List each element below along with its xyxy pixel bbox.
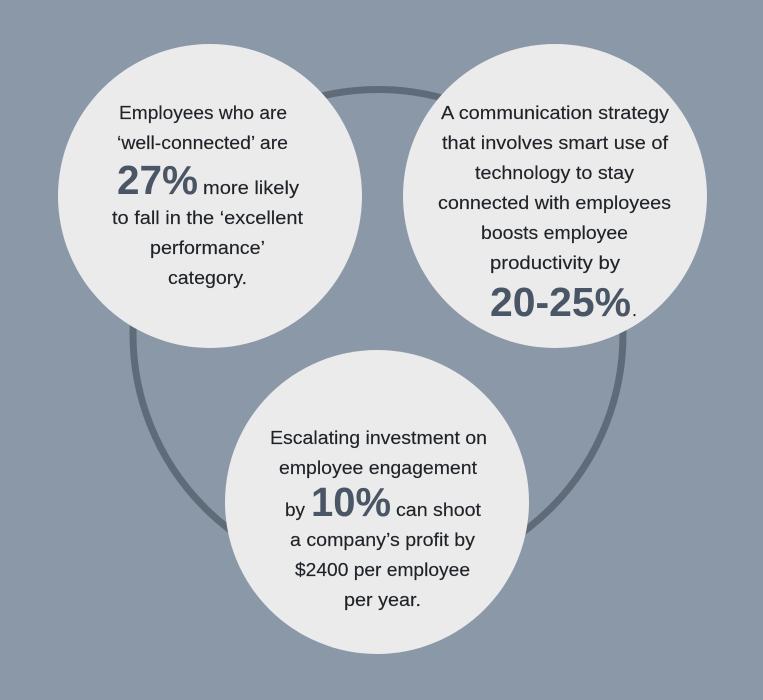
panel: employee engagement investment: [225, 350, 529, 654]
text: communication strategy description: connected with employees: [438, 193, 671, 213]
text: communication strategy description: that involves smart use of: [442, 133, 669, 153]
text: investment intro: by: [285, 500, 305, 520]
statistic: 20-25%: 20-25%: [490, 279, 631, 325]
text: communication strategy description: boosts employee: [481, 223, 628, 243]
statistic: 10%: 10%: [311, 479, 391, 525]
text: investment intro: [270, 428, 487, 520]
panel: well-connected employees: [58, 44, 362, 348]
text: investment outcome: per year.: [344, 590, 421, 610]
text: communication strategy description: A communication strategy: [441, 103, 669, 123]
connecting ring: [133, 90, 623, 580]
text: investment intro: employee engagement: [279, 458, 477, 478]
text: investment outcome: can shoot: [396, 500, 481, 520]
text: investment outcome: a company’s profit by: [290, 530, 475, 550]
text: communication strategy description: technology to stay: [475, 163, 634, 183]
statistic: 27%: 27%: [117, 157, 198, 203]
text: investment outcome: [290, 500, 481, 610]
text: well-connected outcome: more likely: [203, 178, 299, 198]
text: well-connected intro: Employees who are: [119, 103, 287, 123]
text: well-connected outcome: performance’: [150, 238, 265, 258]
text: well-connected intro: ‘well-connected’ are: [117, 133, 288, 153]
text: investment intro: Escalating investment on: [270, 428, 487, 448]
text: well-connected outcome: [112, 178, 303, 288]
text: investment outcome: $2400 per employee: [295, 560, 470, 580]
panel: communication strategy: [403, 44, 707, 348]
text: period: .: [632, 300, 637, 320]
text: well-connected outcome: category.: [168, 268, 247, 288]
text: communication strategy description: [438, 103, 671, 273]
text: well-connected intro: [117, 103, 288, 153]
text: well-connected outcome: to fall in the ‘excellent: [112, 208, 303, 228]
text: communication strategy description: productivity by: [490, 253, 620, 273]
